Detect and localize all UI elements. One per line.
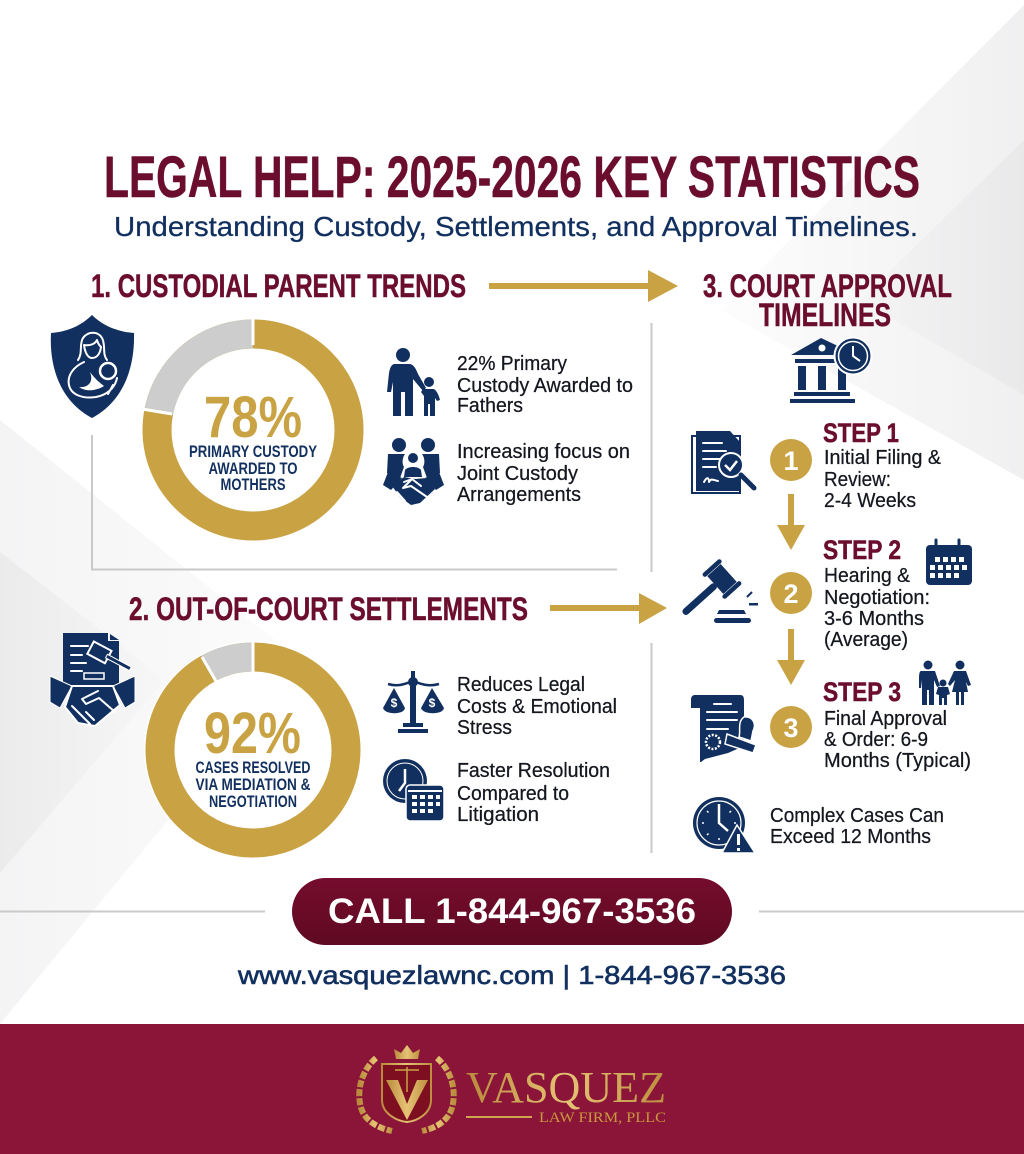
donut chart: 78 percent: AWARDED TO	[208, 459, 298, 478]
donut chart: 92 percent	[144, 640, 362, 859]
step 2 text: (Average)	[824, 629, 908, 651]
step 3 text: Final Approval	[824, 708, 947, 730]
step 3 text: Months (Typical)	[824, 750, 971, 772]
icon: mother and baby shield	[51, 315, 134, 418]
text: faster resolution: Faster Resolution	[457, 760, 610, 782]
text: faster resolution: Compared to	[457, 783, 569, 805]
icon: calendar	[926, 540, 972, 585]
step 3 text: STEP 3	[823, 677, 901, 707]
step 2 marker	[770, 572, 812, 614]
heading: custodial parent trends: 1. CUSTODIAL PARENT TRENDS	[91, 268, 466, 304]
step 1 marker: 1	[783, 446, 799, 476]
arrow: section 2 to section 3	[550, 593, 667, 624]
donut chart: 92 percent: 92%	[204, 701, 301, 766]
text: complex cases	[770, 805, 944, 848]
heading: out-of-court settlements: 2. OUT-OF-COURT SETTLEMENTS	[129, 591, 528, 627]
step 1 marker	[770, 439, 812, 481]
step 2 text: Hearing &	[824, 565, 911, 587]
text: faster resolution	[457, 760, 610, 826]
call button: CALL 1-844-967-3536	[328, 892, 696, 931]
subtitle: Understanding Custody, Settlements, and Approval Timelines.	[114, 211, 918, 242]
icon: scales with dollars	[383, 671, 444, 733]
step 3 text: & Order: 6-9	[824, 729, 928, 751]
step 1 text: Review:	[824, 469, 891, 491]
text: fathers: Custody Awarded to	[457, 375, 633, 397]
step 2 marker: 2	[783, 579, 799, 609]
donut chart: 78 percent: PRIMARY CUSTODY	[189, 442, 318, 461]
text: fathers: 22% Primary	[457, 353, 567, 375]
footer band	[0, 1024, 1024, 1154]
donut chart: 92 percent: CASES RESOLVED	[196, 758, 310, 777]
heading: court approval timelines: TIMELINES	[759, 297, 891, 333]
text: complex cases: Exceed 12 Months	[770, 826, 931, 848]
icon: scales with dollars: $	[429, 696, 436, 710]
donut chart: 92 percent: VIA MEDIATION &	[196, 775, 310, 794]
text: complex cases: Complex Cases Can	[770, 805, 944, 827]
step 3 marker: 3	[783, 713, 799, 743]
icon: document review	[692, 431, 754, 493]
text: legal costs	[457, 674, 617, 739]
icon: gavel	[672, 558, 758, 626]
step 2 text	[823, 535, 930, 651]
step 2 text: 3-6 Months	[824, 608, 924, 630]
text: legal costs: Reduces Legal	[457, 674, 585, 696]
icon: father and child	[387, 348, 440, 416]
arrow: step 2 to step 3	[777, 629, 805, 685]
icon: clock with warning	[693, 797, 755, 853]
icon: scroll and stamp	[691, 695, 756, 762]
step 2 text: Negotiation:	[824, 587, 930, 609]
logo crest	[359, 1045, 454, 1131]
heading: court approval timelines	[703, 268, 952, 333]
step 2 text: STEP 2	[823, 535, 901, 565]
arrow: section 1 to section 3	[489, 270, 678, 302]
donut chart: 78 percent: MOTHERS	[220, 475, 286, 494]
text: legal costs: Stress	[457, 717, 512, 739]
icon: mediation document and handshake	[50, 633, 135, 726]
donut chart: 78 percent	[141, 317, 365, 542]
step 1 text: STEP 1	[823, 418, 899, 448]
step 1 text	[823, 418, 942, 512]
text: faster resolution: Litigation	[457, 804, 539, 826]
text: legal costs: Costs & Emotional	[457, 696, 617, 718]
logo wordmark: VASQUEZ	[466, 1063, 666, 1112]
call button	[292, 878, 732, 945]
donut chart: 78 percent: 78%	[204, 385, 302, 450]
step 1 text: 2-4 Weeks	[824, 490, 916, 512]
text: joint custody: Joint Custody	[457, 463, 578, 485]
contact line: www.vasquezlawnc.com | 1-844-967-3536	[237, 960, 786, 990]
text: joint custody	[457, 441, 630, 506]
icon: courthouse with clock	[790, 338, 872, 403]
icon: scales with dollars: $	[391, 696, 398, 710]
donut chart: 92 percent: NEGOTIATION	[209, 792, 297, 811]
step 3 marker	[770, 706, 812, 748]
text: fathers	[457, 353, 633, 417]
icon: family handshake	[383, 438, 444, 505]
text: joint custody: Increasing focus on	[457, 441, 630, 463]
arrow: step 1 to step 2	[777, 494, 805, 550]
icon: family	[919, 660, 971, 705]
step 1 text: Initial Filing &	[824, 447, 942, 469]
icon: clock and calendar	[383, 759, 444, 821]
step 3 text	[823, 677, 971, 772]
text: joint custody: Arrangements	[457, 484, 581, 506]
text: fathers: Fathers	[457, 395, 523, 417]
logo wordmark: LAW FIRM, PLLC	[539, 1110, 666, 1126]
